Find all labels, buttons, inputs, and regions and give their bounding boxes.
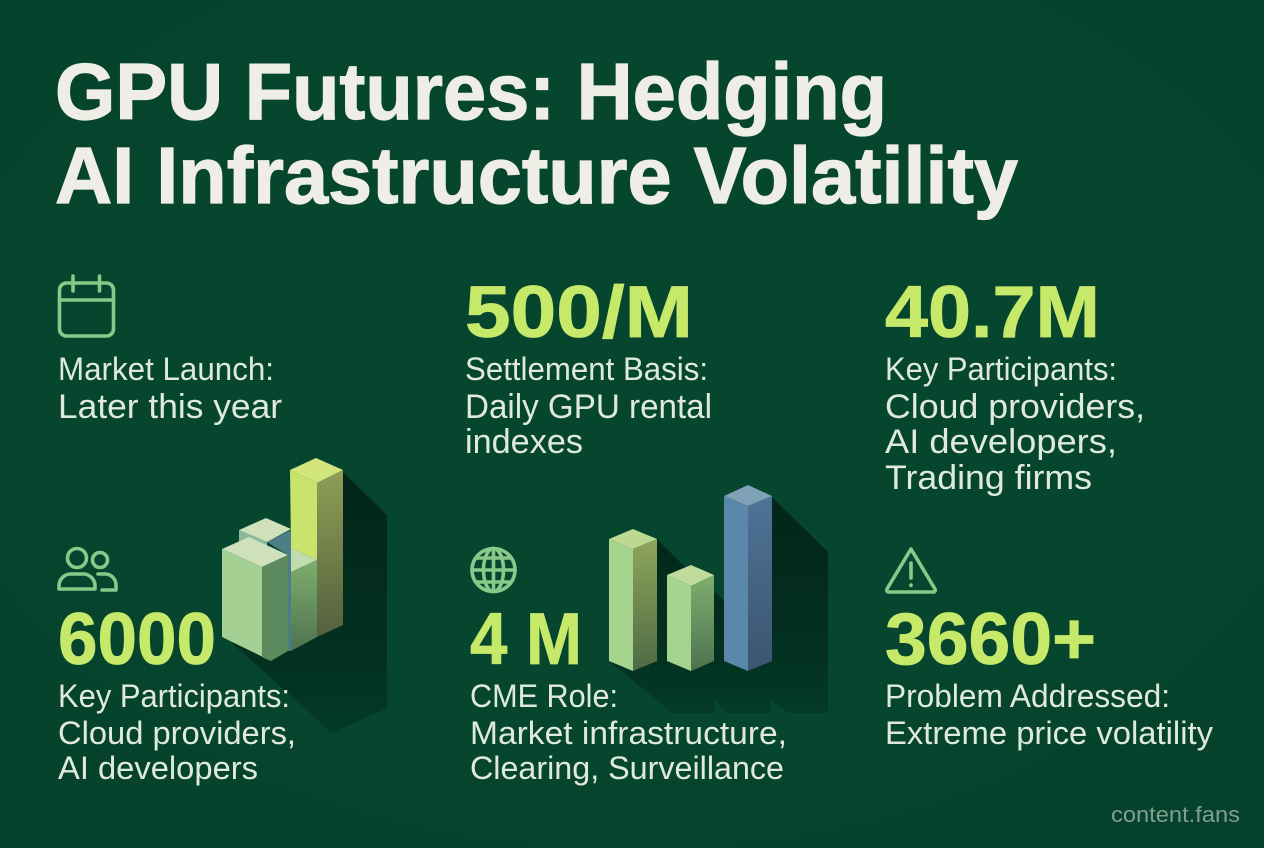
- stat: 40.7M: 40.7M: [885, 272, 1100, 353]
- chart: three bars: [609, 485, 828, 713]
- stat: 6000: 6000: [58, 599, 216, 680]
- market launch text: Later this year: [58, 388, 282, 426]
- settlement text: [465, 351, 712, 461]
- CME text: CME Role:: [470, 678, 618, 714]
- participants text: [885, 351, 1145, 497]
- tall lime bar: [290, 458, 343, 637]
- CME text: Market infrastructure,: [470, 715, 787, 751]
- participants text: Cloud providers,: [58, 715, 296, 751]
- participants text: Key Participants:: [885, 351, 1117, 387]
- bar 3: [724, 485, 772, 671]
- panel: market launch: [58, 276, 282, 426]
- participants text: Trading firms: [885, 459, 1092, 497]
- CME text: [470, 678, 787, 786]
- problem text: Extreme price volatility: [885, 715, 1213, 751]
- panel: key participants bottom: [58, 548, 296, 786]
- panel: settlement basis: [465, 272, 712, 461]
- settlement text: Settlement Basis:: [465, 351, 708, 387]
- stat: 500/M: 500/M: [465, 272, 693, 353]
- front bar: [222, 537, 288, 661]
- participants text: [58, 678, 296, 786]
- icon: globe: [472, 548, 515, 592]
- settlement text: Daily GPU rental: [465, 388, 712, 426]
- bar 1: [609, 529, 657, 671]
- CME text: Clearing, Surveillance: [470, 750, 784, 786]
- stat: 4 M: 4 M: [470, 599, 582, 680]
- panel: key participants top: [885, 272, 1145, 497]
- participants text: Cloud providers,: [885, 388, 1145, 426]
- settlement text: indexes: [465, 423, 583, 461]
- panel: CME role: [470, 548, 787, 786]
- problem text: [885, 678, 1213, 751]
- shadow: [232, 472, 387, 733]
- participants text: AI developers: [58, 750, 258, 786]
- icon: warning: [887, 549, 935, 592]
- title: GPU Futures: Hedging: [55, 47, 887, 136]
- participants text: Key Participants:: [58, 678, 290, 714]
- back bar: [239, 518, 291, 651]
- bar 2: [667, 565, 714, 671]
- participants text: AI developers,: [885, 423, 1117, 461]
- shadow: [609, 497, 828, 713]
- market launch text: Market Launch:: [58, 351, 274, 387]
- short middle bar: [291, 548, 317, 651]
- market launch text: [58, 351, 282, 426]
- stat: 3660+: 3660+: [885, 599, 1096, 680]
- problem text: Problem Addressed:: [885, 678, 1170, 714]
- title: [55, 47, 1019, 220]
- chart: isometric cluster: [222, 458, 387, 733]
- title: AI Infrastructure Volatility: [55, 131, 1019, 220]
- icon: users: [59, 548, 116, 590]
- panel: problem addressed: [885, 549, 1213, 751]
- icon: calendar: [60, 276, 114, 336]
- watermark: content.fans: [1111, 802, 1240, 827]
